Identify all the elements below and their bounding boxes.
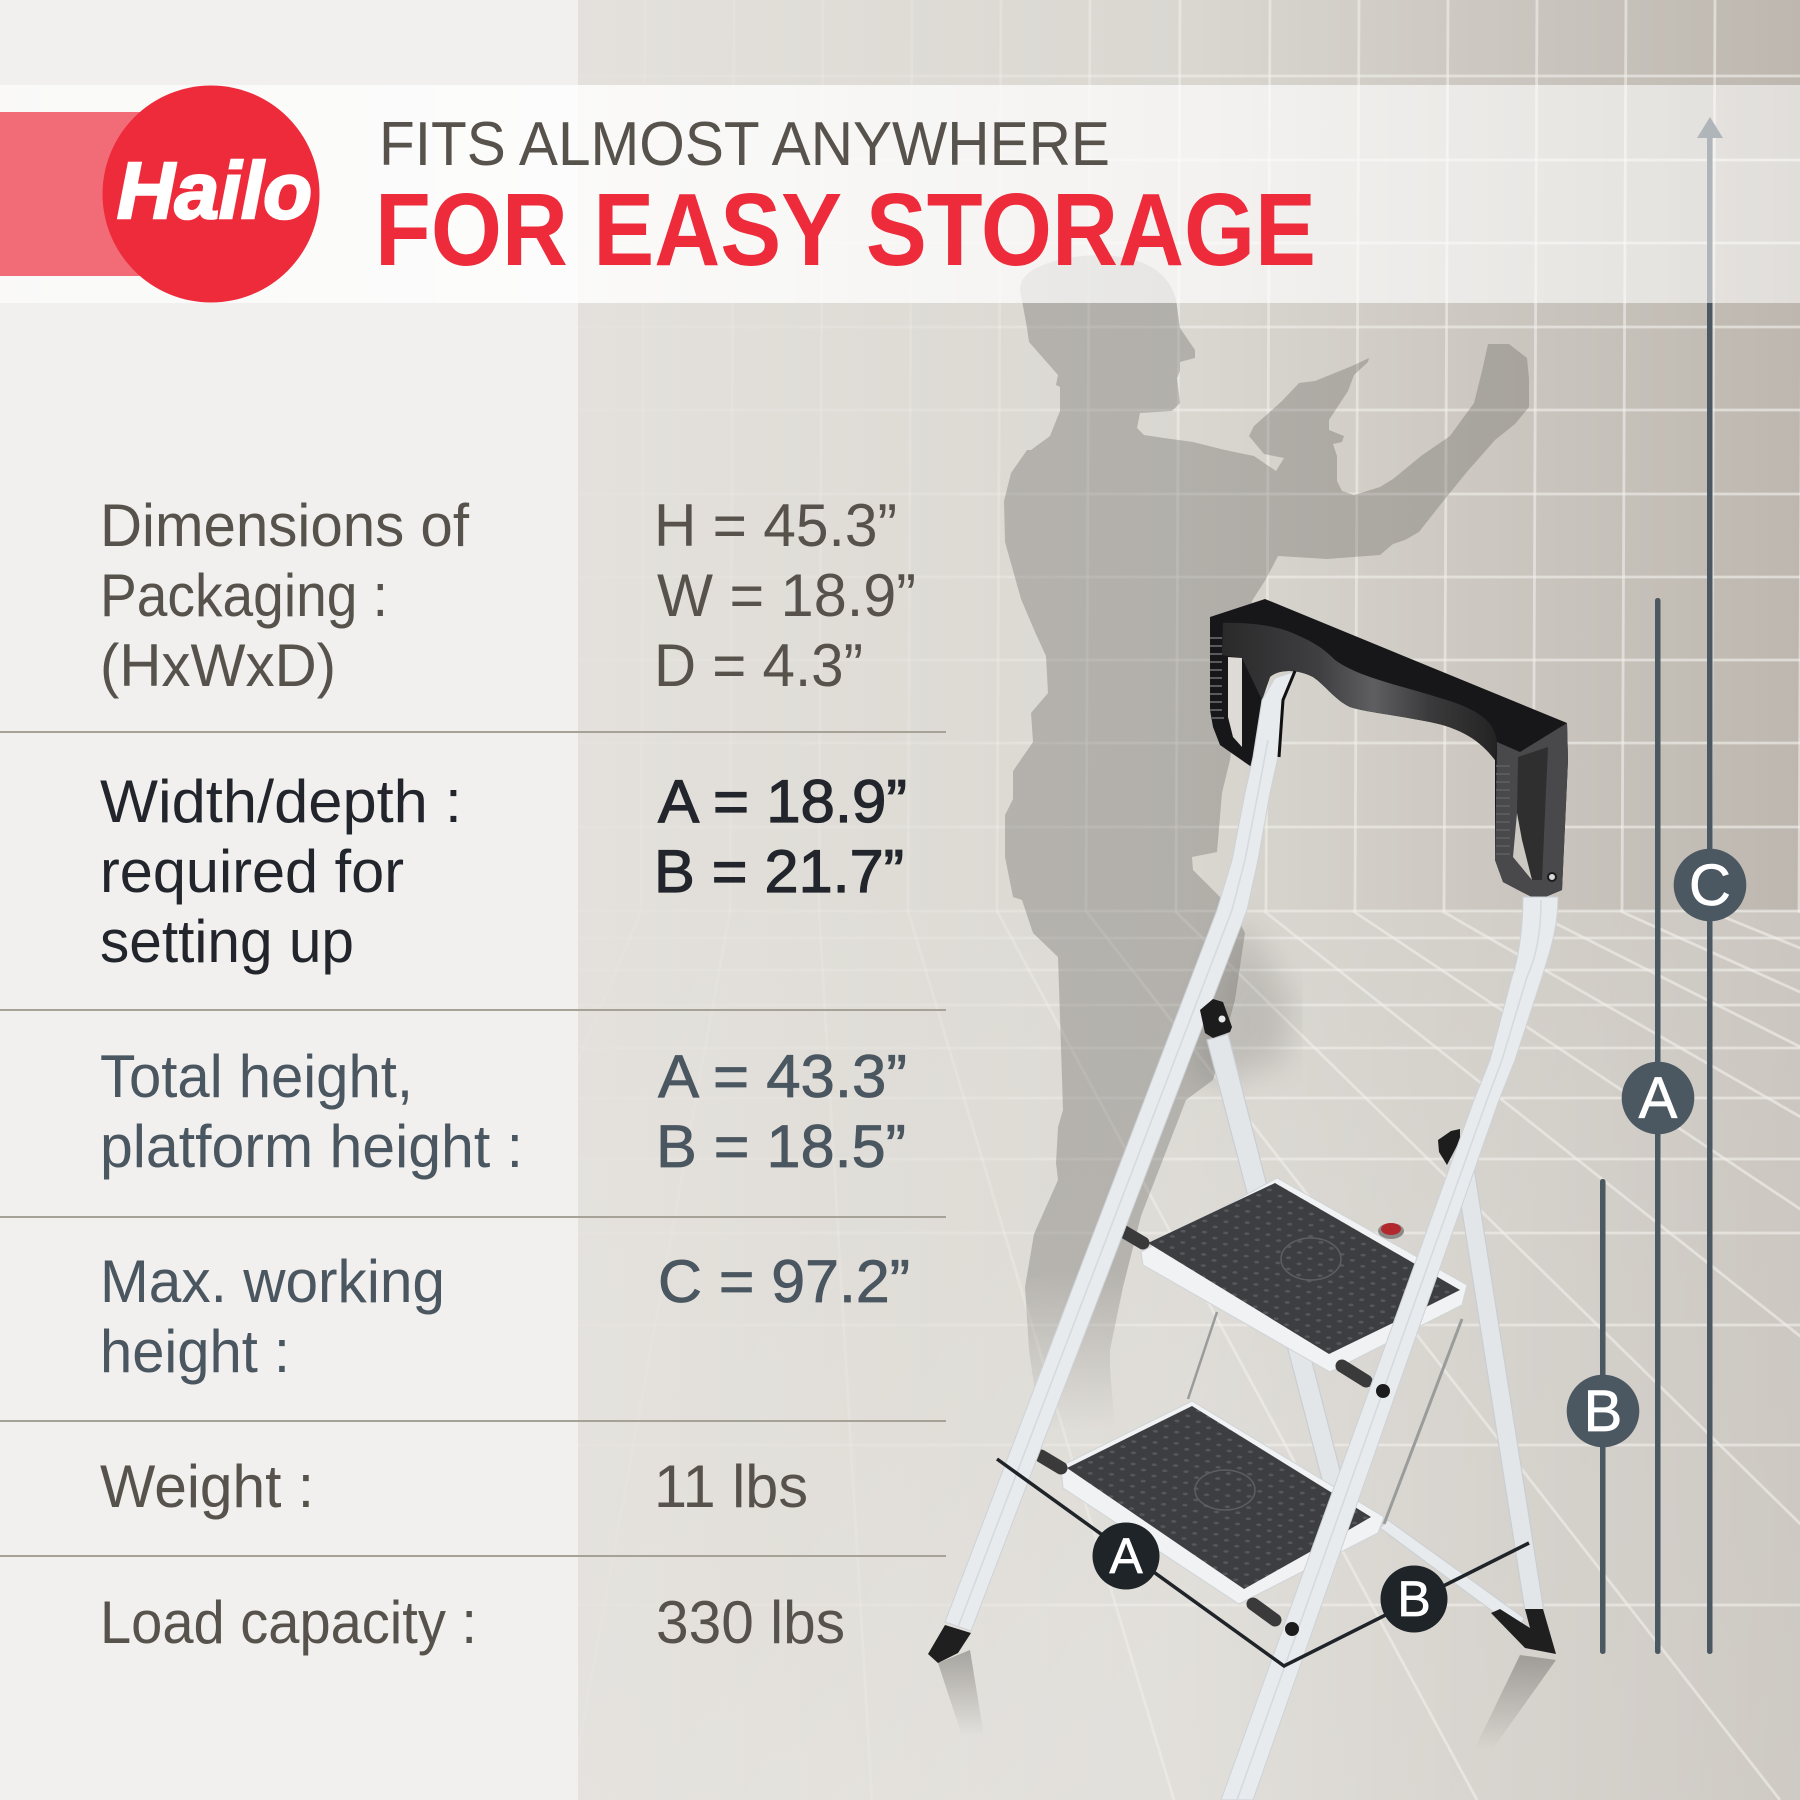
rungs (1041, 1230, 1366, 1620)
marker A total height (1622, 1062, 1694, 1134)
marker A width: A (1109, 1528, 1143, 1584)
upper step (1141, 1178, 1467, 1372)
opening left (1228, 657, 1242, 747)
dimension lines A and B (1600, 598, 1660, 1654)
rear legs (1207, 1034, 1544, 1618)
row: max working height: C = 97.2” (658, 1248, 910, 1315)
row: packaging dimensions: Packaging : (100, 562, 388, 629)
specification table (100, 492, 916, 1656)
red release button (1378, 1223, 1404, 1239)
grip ribs (1210, 638, 1510, 854)
row: weight: Weight : (100, 1453, 314, 1520)
connecting rods (1188, 1312, 1462, 1524)
row: load capacity: Load capacity : (100, 1589, 477, 1656)
header band (0, 85, 1800, 303)
title (375, 110, 1316, 287)
rear spar and black foot (1380, 1520, 1556, 1654)
row: weight (100, 1453, 808, 1520)
product: step ladder (928, 599, 1568, 1800)
title: FITS ALMOST ANYWHERE (379, 110, 1110, 179)
marker C max working height (1674, 849, 1746, 921)
logo: Hailo red badge (0, 86, 320, 302)
marker B depth (1380, 1566, 1448, 1632)
left panel (0, 0, 578, 1800)
row: total and platform height: B = 18.5” (656, 1113, 906, 1180)
row: max working height: height : (100, 1318, 290, 1385)
measure lines A and B on the floor (997, 1459, 1529, 1666)
row: width and depth: Width/depth : (100, 768, 462, 835)
row: load capacity (100, 1589, 845, 1656)
black feet left (928, 1625, 971, 1663)
right front rail (1221, 897, 1558, 1800)
row: width and depth (100, 768, 907, 975)
row: max working height (100, 1248, 910, 1385)
row: width and depth: A = 18.9” (658, 768, 907, 835)
marker B platform height: B (1584, 1379, 1622, 1444)
dimension line C with arrow (1697, 117, 1723, 1654)
row: packaging dimensions: H = 45.3” (654, 492, 897, 559)
row: max working height: Max. working (100, 1248, 445, 1315)
row: packaging dimensions: W = 18.9” (657, 562, 916, 629)
row: weight: 11 lbs (654, 1453, 808, 1520)
left front rail (945, 671, 1295, 1631)
row: width and depth: required for (100, 838, 404, 905)
top tray handle (1210, 599, 1568, 900)
row: total and platform height (100, 1043, 907, 1180)
right end block (1495, 723, 1568, 900)
row: total and platform height: A = 43.3” (658, 1043, 907, 1110)
marker B platform height (1567, 1375, 1639, 1447)
marker A total height: A (1639, 1066, 1678, 1131)
rear cap (1438, 1129, 1460, 1165)
row: width and depth: setting up (100, 908, 354, 975)
row: total and platform height: platform height : (100, 1113, 523, 1180)
title: FOR EASY STORAGE (375, 172, 1316, 287)
row: load capacity: 330 lbs (656, 1589, 845, 1656)
row: packaging dimensions (100, 492, 916, 699)
logo: Hailo red badge: Hailo (117, 146, 312, 235)
row: total and platform height: Total height, (100, 1043, 413, 1110)
row: packaging dimensions: Dimensions of (100, 492, 469, 559)
lower step (1061, 1401, 1384, 1604)
marker B depth: B (1397, 1571, 1431, 1627)
marker C max working height: C (1689, 853, 1731, 918)
foot shadows (938, 1650, 1556, 1750)
row: width and depth: B = 21.7” (654, 838, 904, 905)
silhouette: man with drill (1004, 255, 1529, 1430)
row: packaging dimensions: D = 4.3” (654, 632, 863, 699)
row: packaging dimensions: (HxWxD) (100, 632, 336, 699)
marker A width (1092, 1522, 1160, 1590)
joints and rivets (1200, 999, 1390, 1636)
